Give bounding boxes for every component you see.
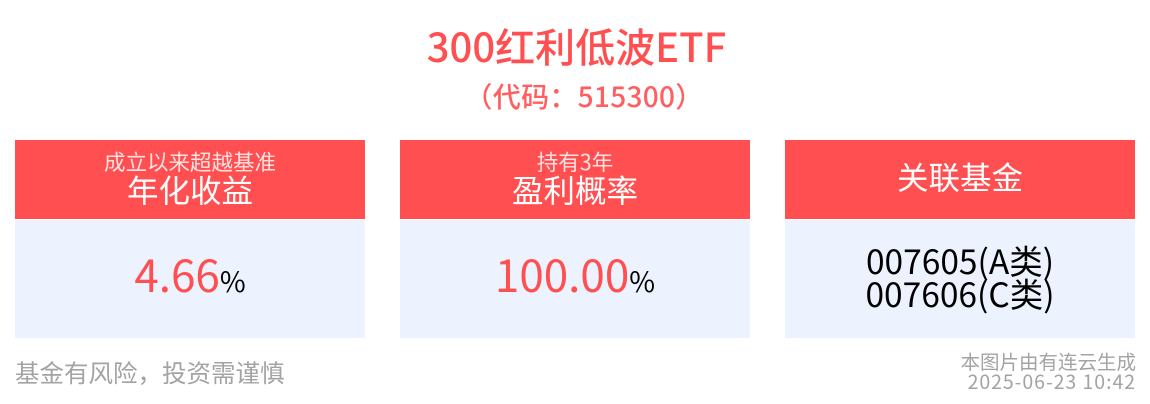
header: annualized return (15, 140, 365, 219)
header main text: 年化收益 (127, 166, 253, 212)
source and timestamp: 2025-06-23 10:42 (968, 366, 1136, 395)
header: related funds (785, 140, 1135, 219)
fund codes: 007606(C类) (865, 268, 1055, 317)
panel: annualized return (15, 140, 365, 338)
title: 300红利低波ETF (427, 16, 726, 74)
header small text: 持有3年 (537, 146, 613, 177)
header main text: 盈利概率 (512, 166, 638, 212)
panel: related funds (785, 140, 1135, 338)
header: win rate (400, 140, 750, 219)
value: 4.66%: 4.66% (134, 241, 246, 305)
fund codes (785, 220, 1135, 338)
value: 100.00% (400, 220, 750, 338)
header text: 关联基金 (897, 153, 1023, 199)
header small text: 成立以来超越基准 (104, 146, 276, 177)
fund codes: 007605(A类) (866, 235, 1054, 284)
subtitle: fund code: （代码：515300） (464, 76, 704, 116)
value: 100.00%: 100.00% (495, 241, 655, 305)
source and timestamp (960, 346, 1136, 395)
value: 4.66% (15, 220, 365, 338)
source and timestamp: 本图片由有连云生成 (960, 346, 1136, 375)
panel: win rate (400, 140, 750, 338)
risk notice: 基金有风险，投资需谨慎 (15, 355, 284, 390)
